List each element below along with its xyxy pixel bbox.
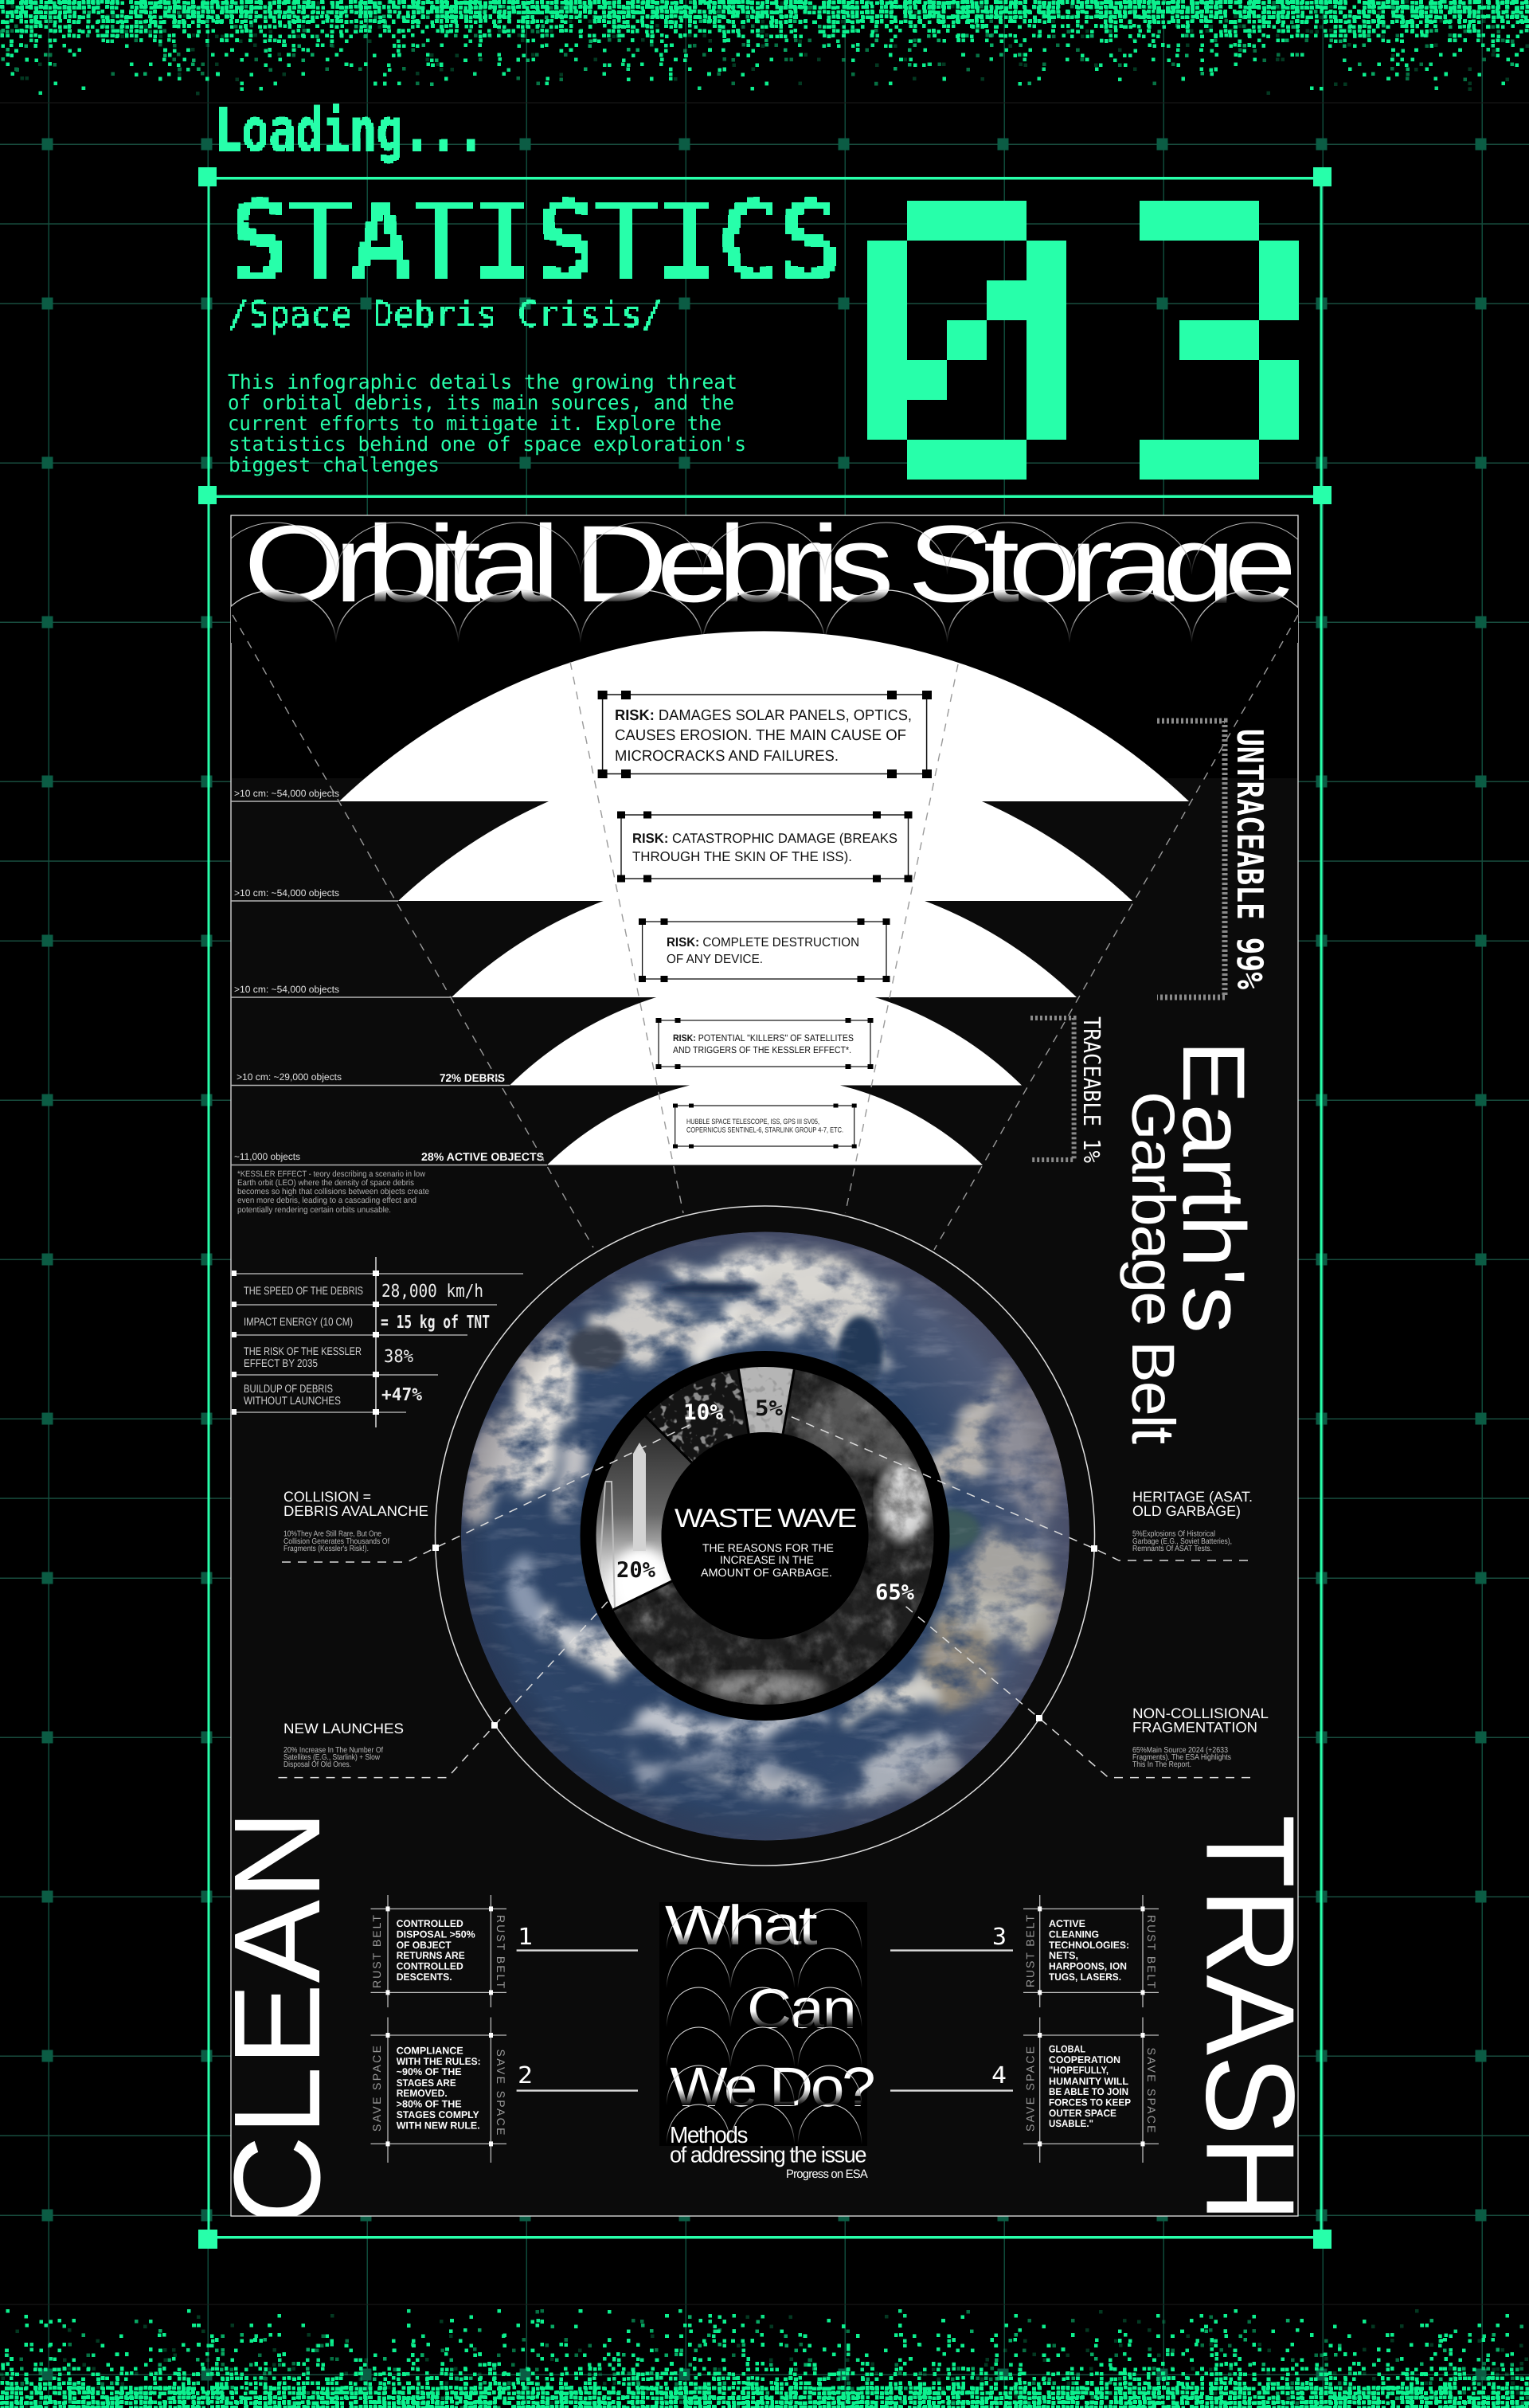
- orbit domes: [339, 631, 1189, 1165]
- band base lines: [231, 801, 547, 1165]
- method box 4: COOPERATION: [1049, 2054, 1120, 2065]
- donut title: AMOUNT OF GARBAGE.: [701, 1566, 832, 1579]
- intro paragraph: This infographic details the growing threat: [228, 370, 737, 394]
- centre heading: What Can We Do?: [665, 1894, 874, 2118]
- stats table: THE SPEED OF THE DEBRIS: [244, 1284, 363, 1297]
- donut percent labels: 10%: [683, 1400, 724, 1425]
- step number 1: 1: [518, 1923, 533, 1950]
- callout: heritage: 5%Explosions Of Historical: [1132, 1530, 1215, 1539]
- method box 4: HUMANITY WILL: [1049, 2076, 1128, 2087]
- stats table: IMPACT ENERGY (10 CM): [244, 1315, 353, 1328]
- method box 2: WITH THE RULES:: [397, 2056, 481, 2067]
- callout: collision: DEBRIS AVALANCHE: [284, 1503, 428, 1519]
- callout: heritage: Remnants Of ASAT Tests.: [1132, 1545, 1212, 1553]
- risk box 3: [639, 918, 890, 982]
- band object counts: >10 cm: ~54,000 objects: [234, 788, 339, 799]
- risk box 4: RISK: POTENTIAL "KILLERS" OF SATELLITES: [673, 1032, 854, 1043]
- decorative arches over title: [213, 590, 1314, 643]
- method box 4: SAVE SPACE: [1024, 2046, 1037, 2132]
- method box 3: RUST BELT: [1024, 1915, 1037, 1987]
- band object counts: ~11,000 objects: [234, 1151, 300, 1162]
- stats table: +47%: [381, 1385, 423, 1405]
- callout: new launches: [284, 1721, 404, 1769]
- kessler effect note: even more debris, leading to a cascading effect and: [237, 1196, 416, 1205]
- heading: STATISTICS: STATISTICS: [229, 181, 841, 303]
- band object counts: >10 cm: ~54,000 objects: [234, 887, 339, 899]
- band object counts: >10 cm: ~54,000 objects: [234, 984, 339, 995]
- centre caption: [670, 2123, 868, 2181]
- method box 1: DISPOSAL >50%: [397, 1929, 475, 1940]
- donut title: [675, 1503, 856, 1579]
- donut title: WASTE WAVE: [675, 1503, 856, 1533]
- stats table: 38%: [384, 1347, 413, 1367]
- centre block black backing: [659, 1902, 867, 2146]
- stats table: = 15 kg of TNT: [381, 1313, 490, 1333]
- label: 28% active objects: 28% ACTIVE OBJECTS: [421, 1150, 544, 1163]
- donut: outer black ring: [580, 1351, 949, 1721]
- side label: untraceable 99%: [1157, 721, 1271, 997]
- method box 2: SAVE SPACE: [370, 2046, 383, 2132]
- band object counts: >10 cm: ~29,000 objects: [237, 1071, 342, 1083]
- callout: heritage: [1132, 1489, 1253, 1553]
- stats table: EFFECT BY 2035: [244, 1357, 318, 1369]
- method box 1: RUST BELT: [370, 1915, 383, 1988]
- callout: heritage: OLD GARBAGE): [1132, 1503, 1241, 1519]
- label: 72% debris: 72% DEBRIS: [440, 1071, 505, 1084]
- callout: new launches: Satellites (E.G., Starlink) + Slow: [284, 1753, 381, 1762]
- callout: non-collisional fragmentation: Fragments). The ESA Highlights: [1132, 1753, 1231, 1762]
- method box 3: NETS,: [1049, 1950, 1078, 1961]
- donut percent labels: 65%: [875, 1580, 915, 1605]
- heading: Loading: Loading...: [215, 96, 484, 165]
- method box 2: STAGES COMPLY: [397, 2109, 479, 2120]
- callout: non-collisional fragmentation: 65%Main Source 2024 (+2633: [1132, 1746, 1228, 1755]
- method box 1: DESCENTS.: [397, 1971, 452, 1983]
- donut title: INCREASE IN THE: [720, 1553, 814, 1566]
- method box 2: [370, 2017, 507, 2163]
- method box 2: >80% OF THE: [397, 2099, 462, 2110]
- callout: collision: COLLISION =: [284, 1489, 371, 1505]
- main panel: [231, 515, 1298, 2216]
- method box 1: CONTROLLED: [397, 1961, 463, 1972]
- centre heading: What Can We Do?: What: [665, 1894, 817, 1956]
- method box 3: CLEANING: [1049, 1929, 1099, 1940]
- intro paragraph: statistics behind one of space exploration's: [229, 433, 746, 456]
- intro paragraph: current efforts to mitigate it. Explore the: [228, 412, 721, 435]
- risk box 4: AND TRIGGERS OF THE KESSLER EFFECT*.: [673, 1044, 851, 1055]
- risk box 3: RISK: COMPLETE DESTRUCTION: [667, 936, 859, 949]
- donut segment: 20% launches: [596, 1417, 691, 1610]
- method box 1: OF OBJECT: [397, 1940, 452, 1951]
- donut segment separators: [613, 1369, 794, 1610]
- donut segment: 10% fragments: [647, 1369, 747, 1462]
- risk box 1: CAUSES EROSION. THE MAIN CAUSE OF: [615, 727, 906, 744]
- centre heading: What Can We Do?: Can: [747, 1978, 855, 2040]
- donut percent labels: [616, 1396, 915, 1605]
- method box 4: OUTER SPACE: [1049, 2108, 1116, 2119]
- callout: non-collisional fragmentation: FRAGMENTATION: [1132, 1719, 1257, 1735]
- centre heading: What Can We Do?: We Do?: [670, 2056, 874, 2118]
- risk box 3: OF ANY DEVICE.: [667, 953, 763, 966]
- method box 4: [1023, 2017, 1159, 2163]
- callout: non-collisional fragmentation: This In The Report.: [1132, 1760, 1191, 1769]
- method box 2: COMPLIANCE: [397, 2046, 463, 2057]
- method box 3: RUST BELT: [1145, 1915, 1158, 1988]
- pixel noise: top band: [0, 0, 1529, 100]
- title: Orbital Debris Storage: Orbital Debris Storage: [244, 503, 1292, 625]
- stats table: BUILDUP OF DEBRIS: [244, 1382, 333, 1395]
- method box 3: TUGS, LASERS.: [1049, 1971, 1121, 1983]
- centre caption: of addressing the issue: [670, 2143, 866, 2167]
- risk box 1: RISK: DAMAGES SOLAR PANELS, OPTICS,: [615, 707, 912, 724]
- donut title: THE REASONS FOR THE: [702, 1541, 834, 1554]
- vertical title: Garbage Belt: Garbage Belt: [1119, 1091, 1187, 1444]
- subheading: /Space Debris Crisis/: [228, 293, 663, 335]
- stats table: THE RISK OF THE KESSLER: [244, 1345, 362, 1357]
- pixel noise: bottom band: [0, 2304, 1529, 2408]
- callout anchor squares: [432, 1545, 1097, 1729]
- centre caption: Methods: [670, 2123, 748, 2148]
- title descender mask: [232, 603, 1297, 651]
- callout: non-collisional fragmentation: [1132, 1705, 1269, 1769]
- callout: new launches: NEW LAUNCHES: [284, 1721, 404, 1737]
- band object counts: [234, 788, 342, 1162]
- donut percent labels: 5%: [755, 1396, 784, 1421]
- callout: heritage: HERITAGE (ASAT.: [1132, 1489, 1253, 1505]
- method box 3: HARPOONS, ION: [1049, 1961, 1127, 1972]
- method box 4: FORCES TO KEEP: [1049, 2097, 1131, 2108]
- green frame: [198, 167, 1332, 2249]
- risk box 1: [598, 691, 932, 778]
- upper arches: [213, 523, 1314, 575]
- callout: new launches: 20% Increase In The Number Of: [284, 1746, 383, 1755]
- step number 2: 2: [518, 2061, 533, 2089]
- method box 1: [370, 1895, 507, 2007]
- callout: heritage: Garbage (E.G., Soviet Batteries),: [1132, 1537, 1232, 1546]
- kessler effect note: *KESSLER EFFECT - teory describing a scenario in low: [237, 1169, 425, 1179]
- method box 4: GLOBAL: [1049, 2043, 1085, 2054]
- callout leader lines: [279, 1415, 1250, 1778]
- active objects box: COPERNICUS SENTINEL-6, STARLINK GROUP 4-7, ETC.: [686, 1126, 843, 1134]
- side label: untraceable 99%: UNTRACEABLE 99%: [1229, 729, 1271, 989]
- method box 2: ~90% OF THE: [397, 2066, 462, 2077]
- method box 3: ACTIVE: [1049, 1918, 1085, 1929]
- step number 3: 3: [992, 1923, 1007, 1950]
- callout: new launches: Disposal Of Old Ones.: [284, 1760, 351, 1769]
- method box 1: RUST BELT: [495, 1915, 507, 1988]
- side label: traceable 1%: [1030, 1016, 1105, 1163]
- callout: collision: Fragments (Kessler's Risk!).: [284, 1545, 369, 1553]
- big number 3: 3: [1110, 137, 1328, 558]
- method box 2: SAVE SPACE: [495, 2049, 507, 2135]
- intro paragraph: [228, 370, 746, 476]
- donut centre: [661, 1432, 868, 1639]
- earth photo illustration: [446, 1219, 1083, 1856]
- kessler effect note: potentially rendering certain orbits unusable.: [237, 1205, 391, 1215]
- method box 4: BE ABLE TO JOIN: [1049, 2086, 1128, 2097]
- method box 3: [1023, 1895, 1159, 2007]
- intro paragraph: of orbital debris, its main sources, and the: [228, 391, 734, 414]
- risk box 2: [617, 811, 913, 883]
- large word: CLEAN: CLEAN: [209, 1810, 346, 2226]
- kessler effect note: [237, 1169, 429, 1215]
- risk box 4: [656, 1018, 873, 1069]
- side label: traceable 1%: TRACEABLE 1%: [1078, 1016, 1105, 1163]
- funnel dashed lines: [233, 615, 1298, 1250]
- donut segment: 5% surface: [738, 1367, 795, 1434]
- method box 4: SAVE SPACE: [1145, 2047, 1158, 2133]
- centre arches: [667, 1909, 862, 2144]
- big number 0: 0: [849, 123, 1085, 555]
- stats table: WITHOUT LAUNCHES: [244, 1394, 341, 1407]
- large word: TRASH: TRASH: [1180, 1815, 1320, 2222]
- method box 2: REMOVED.: [397, 2088, 448, 2099]
- donut segment: 65% explosions: [613, 1369, 933, 1705]
- method box 1: CONTROLLED: [397, 1918, 463, 1929]
- method box 4: "HOPEFULLY,: [1049, 2065, 1109, 2076]
- method box 1: RETURNS ARE: [397, 1950, 465, 1961]
- risk box 2: THROUGH THE SKIN OF THE ISS).: [632, 849, 852, 864]
- intro paragraph: biggest challenges: [229, 453, 440, 476]
- method box 3: TECHNOLOGIES:: [1049, 1940, 1129, 1951]
- donut percent labels: 20%: [616, 1558, 656, 1583]
- active objects box: [673, 1104, 857, 1149]
- stats table: 28,000 km/h: [381, 1282, 483, 1302]
- method box 4: USABLE.": [1049, 2118, 1093, 2129]
- kessler effect note: becomes so high that collisions between objects create: [237, 1187, 429, 1196]
- step number 4: 4: [991, 2061, 1007, 2089]
- callout: collision: [284, 1489, 428, 1553]
- callout: collision: Collision Generates Thousands Of: [284, 1537, 389, 1546]
- kessler effect note: Earth orbit (LEO) where the density of space debris: [237, 1178, 414, 1188]
- method box 2: WITH NEW RULE.: [397, 2120, 480, 2132]
- callout: collision: 10%They Are Still Rare, But One: [284, 1530, 381, 1539]
- stats table: [231, 1257, 523, 1427]
- method box 2: STAGES ARE: [397, 2077, 456, 2089]
- callout: non-collisional fragmentation: NON-COLLISIONAL: [1132, 1705, 1269, 1721]
- risk box 2: RISK: CATASTROPHIC DAMAGE (BREAKS: [632, 831, 897, 846]
- panel top black area: [232, 516, 1297, 778]
- active objects box: HUBBLE SPACE TELESCOPE, ISS, GPS III SV05,: [686, 1118, 819, 1126]
- vertical title: Earth's: Earth's: [1164, 1040, 1263, 1333]
- risk box 1: MICROCRACKS AND FAILURES.: [615, 748, 839, 765]
- centre caption: Progress on ESA: [786, 2167, 868, 2181]
- orbit ring: [435, 1206, 1094, 1866]
